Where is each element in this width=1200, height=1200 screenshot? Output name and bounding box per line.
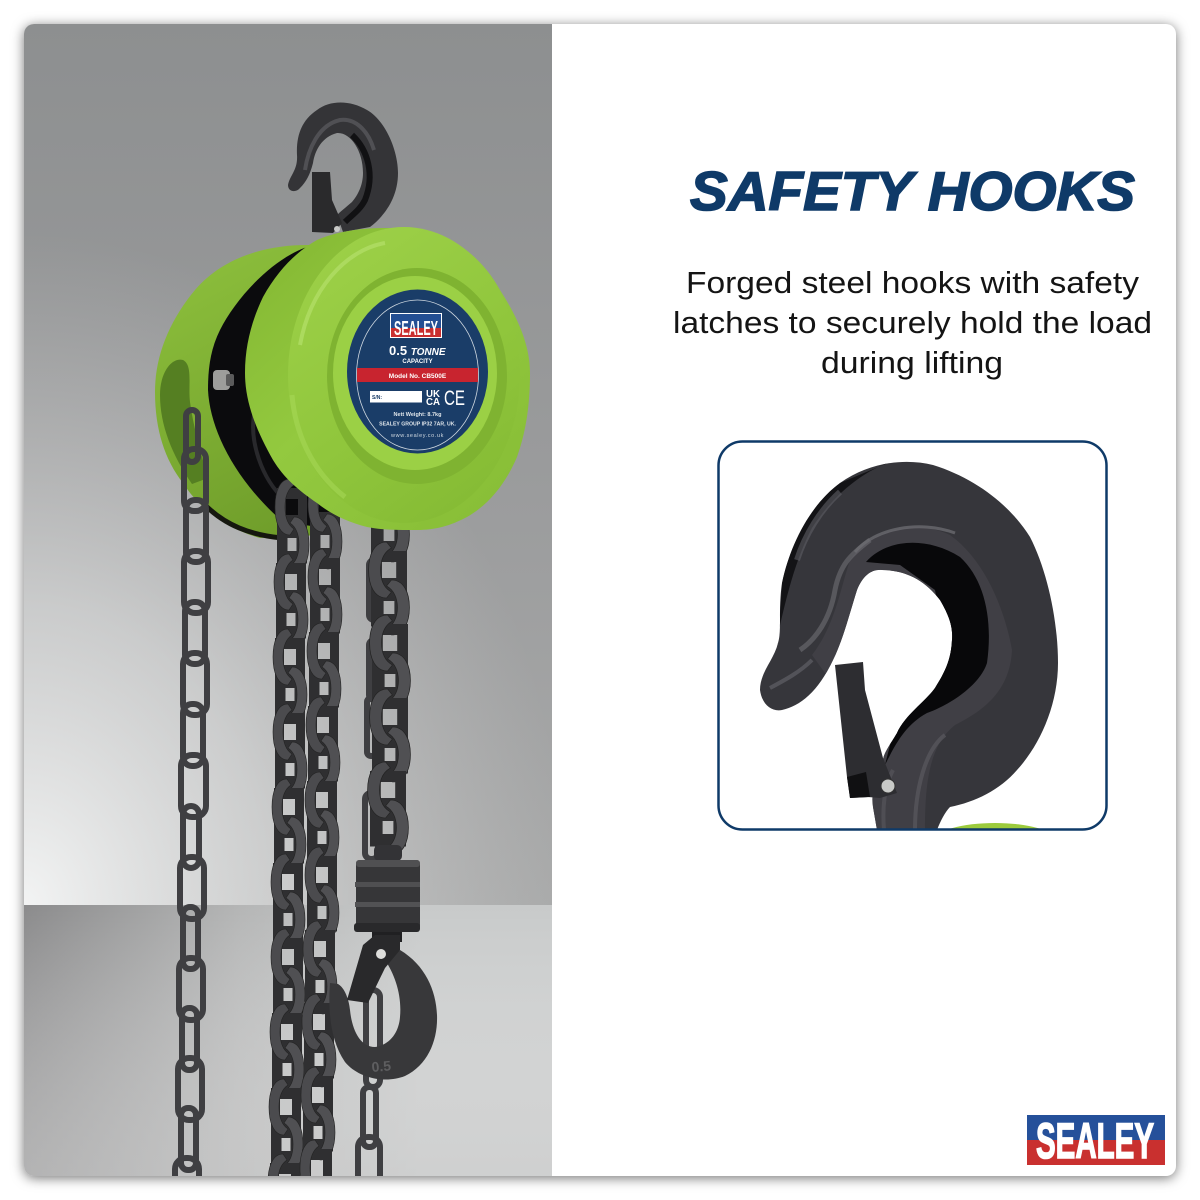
load chain strand two: [300, 476, 342, 1200]
icon: top safety hook: [288, 102, 398, 233]
mounting bolt: [213, 370, 234, 390]
panel: product photo scene: [24, 24, 552, 1176]
icon: lower hook: [329, 935, 437, 1080]
model band: Model No. CB500E: [389, 373, 447, 380]
label details: SEALEY GROUP IP32 7AR, UK.: [379, 422, 456, 428]
serial number box: [370, 391, 422, 402]
capacity text: 0.5 TONNE: [389, 343, 446, 358]
description text: [673, 265, 1152, 380]
compliance marks: UK: [426, 389, 441, 400]
label logo: [390, 313, 442, 340]
floor: [24, 905, 552, 1176]
swivel block: [354, 860, 420, 942]
hoist rear shell: [155, 245, 320, 538]
hoist front shell: [245, 228, 530, 530]
gear detail: [251, 414, 277, 494]
description text: latches to securely hold the load: [673, 305, 1152, 340]
hand chain slot: [160, 360, 203, 484]
serial number box: S/N:: [372, 395, 382, 401]
left hand chain: [175, 410, 208, 1200]
wall backdrop: [24, 24, 552, 906]
description text: during lifting: [821, 345, 1003, 380]
description text: Forged steel hooks with safety: [686, 265, 1140, 300]
label logo: SEALEY: [394, 318, 438, 340]
compliance marks: CA: [426, 397, 440, 408]
chain hoist: [155, 102, 530, 1200]
rear shell lower shadow: [205, 505, 282, 538]
product label: [347, 290, 488, 454]
shell front face: [288, 227, 507, 498]
model band: [357, 368, 478, 382]
label details: www.sealey.co.uk: [390, 433, 444, 439]
panel: hook close-up: [718, 442, 1106, 857]
hook close-up image: [760, 460, 1058, 857]
compliance marks: CE: [444, 387, 465, 410]
label details: [379, 412, 456, 439]
label details: Nett Weight: 8.7kg: [394, 412, 441, 418]
load chain strand one: [268, 479, 309, 1200]
compliance marks: [426, 390, 464, 405]
product label: CAPACITY: [402, 359, 433, 365]
hoist central black plate: [208, 247, 340, 530]
title: SAFETY HOOKS: [690, 160, 1135, 222]
icon: lower hook: 0.5: [371, 1057, 392, 1075]
lower chain below hook: [358, 990, 380, 1199]
hand chain right strand: [365, 469, 410, 861]
